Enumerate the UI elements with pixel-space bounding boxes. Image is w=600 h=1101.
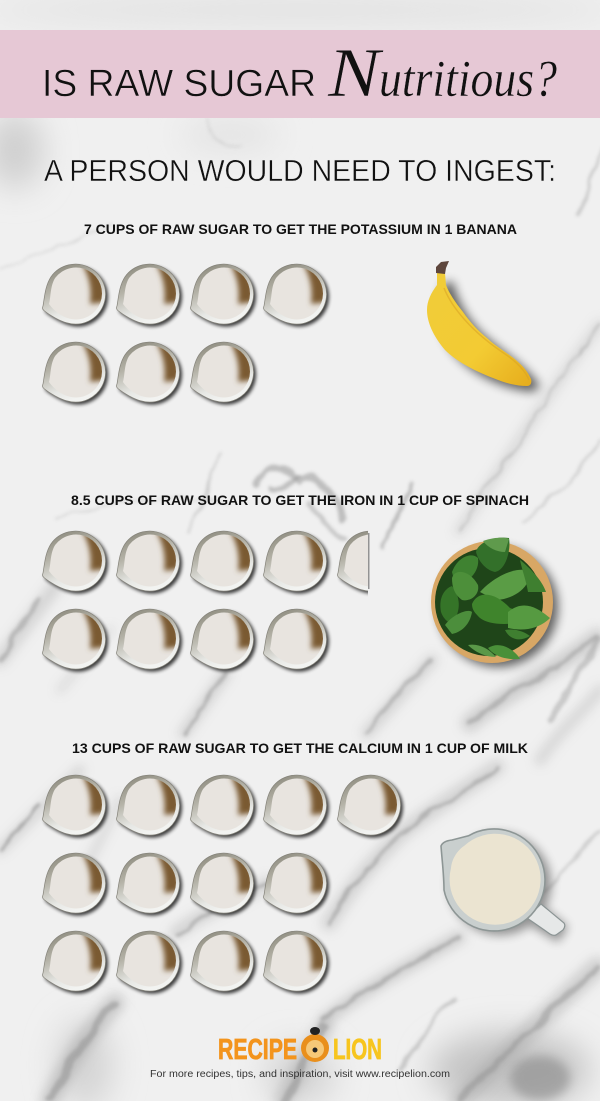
logo: Recipe Lion: RECIPE bbox=[218, 1034, 297, 1066]
logo: Recipe Lion bbox=[218, 1027, 382, 1066]
heading: banana: 7 CUPS OF RAW SUGAR TO GET THE POTASSIUM IN 1 BANANA bbox=[84, 221, 517, 237]
icon: spinach bowl bbox=[431, 538, 558, 667]
cups: 7 cups bbox=[42, 264, 329, 405]
heading: milk: 13 CUPS OF RAW SUGAR TO GET THE CALCIUM IN 1 CUP OF MILK bbox=[72, 740, 528, 756]
broad soft veins bbox=[0, 324, 600, 1100]
icon: banana bbox=[427, 261, 540, 392]
cups: 13 cups bbox=[42, 775, 403, 994]
cups: 8.5 cups bbox=[42, 531, 403, 672]
icon: milk jug bbox=[441, 829, 568, 942]
title text: N bbox=[327, 35, 384, 112]
title text bbox=[42, 35, 557, 112]
title banner bbox=[0, 30, 600, 118]
logo: Recipe Lion: LION bbox=[333, 1034, 382, 1066]
icon: lion face bbox=[301, 1027, 329, 1062]
subtitle: A PERSON WOULD NEED TO INGEST: bbox=[44, 153, 556, 188]
footer text: For more recipes, tips, and inspiration, visit www.recipelion.com bbox=[150, 1069, 450, 1080]
title text: utritious? bbox=[379, 51, 557, 108]
title text: IS RAW SUGAR bbox=[42, 63, 316, 105]
heading: spinach: 8.5 CUPS OF RAW SUGAR TO GET THE IRON IN 1 CUP OF SPINACH bbox=[71, 492, 529, 508]
